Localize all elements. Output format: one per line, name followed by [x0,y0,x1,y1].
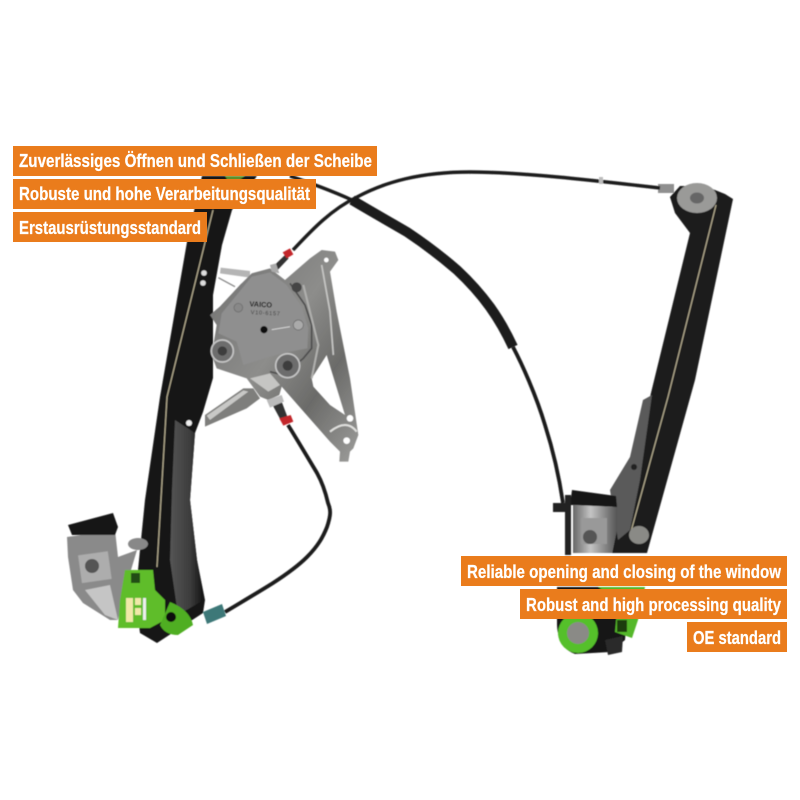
green connector [118,570,165,628]
lighter central plate panel [218,272,308,365]
bolts and holes [211,258,353,444]
metal gearbox plate, drawn in zoom coordinates [205,248,358,462]
label: reliable opening (de) [13,146,377,176]
darker plate crease [270,283,312,375]
lower arm [205,388,260,427]
label: OE standard (de): Erstausrüstungsstandard [19,218,201,238]
label: OE standard (de) [13,212,207,242]
English feature labels [461,556,787,652]
German feature labels [13,146,377,242]
lower left cable [203,425,330,624]
lower spring and red ferrule [267,395,293,426]
plate body [210,250,358,462]
thick cable sleeve [352,200,563,503]
upper clip [210,268,250,315]
right guide rail [610,186,733,553]
green gear wheel [160,602,193,635]
label: OE standard (en) [687,622,787,652]
label: OE standard (en): OE standard [693,628,781,648]
window regulator product photo [67,172,733,655]
label: robust quality (de) [13,179,316,209]
label: reliable opening (en) [461,556,787,586]
upper spring and red ferrule [270,248,293,273]
right lower bracket and green wheel [557,587,645,655]
label: robust quality (de): Robuste und hohe Verarbeitungsqualität [19,184,310,204]
pulley [658,183,717,213]
label: robust quality (en) [520,589,787,619]
left guide rail [136,176,257,643]
main cable upper [290,172,660,250]
left carriage slider [67,513,148,620]
right carriage slider [553,490,617,555]
label: reliable opening (de): Zuverlässiges Öffnen und Schließen der Scheibe [19,151,372,171]
VAICO logo: VAICO [249,299,273,310]
part number: V10-6157 [251,310,281,318]
